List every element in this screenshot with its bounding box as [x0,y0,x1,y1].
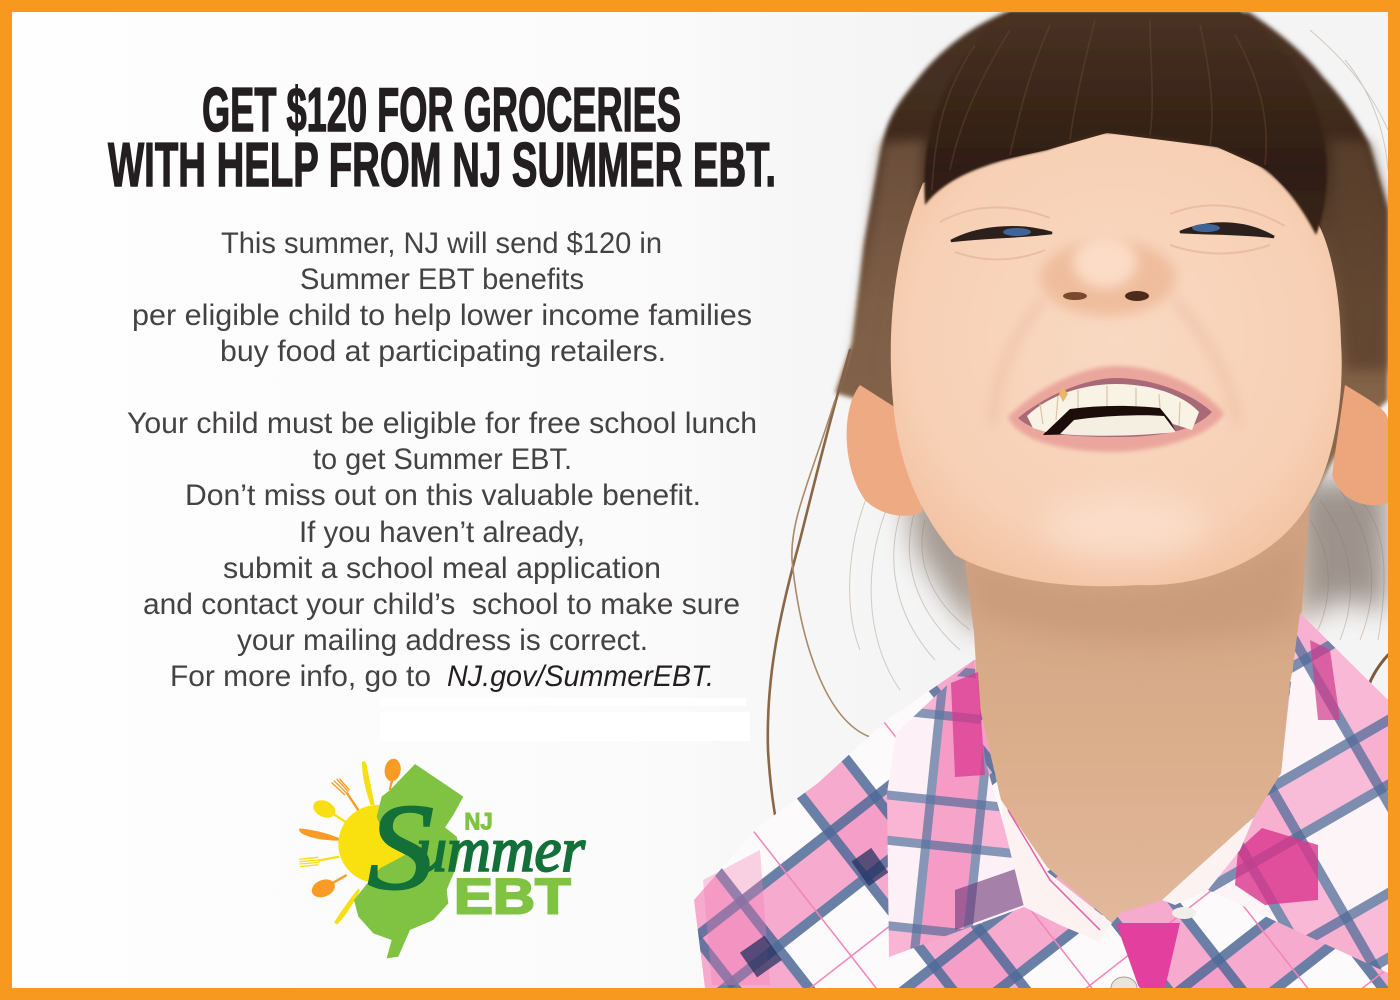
icon: sun [338,805,416,883]
eligibility paragraph: Your child must be eligible for free school lunch [127,407,757,440]
eligibility paragraph: and contact your child’s school to make sure [143,588,740,621]
right eye [1180,224,1274,237]
eligibility paragraph [127,407,757,693]
shirt panel under left collar [889,907,1140,988]
long loose hair strands [768,350,1388,930]
photo: smiling girl in plaid shirt [694,12,1388,999]
lower teeth [1060,415,1176,436]
logo text: EBT: EBT [454,868,571,924]
upper teeth [1027,384,1199,432]
hair lighter side strands [850,40,1388,400]
left collar [887,660,1112,957]
left eye [951,227,1052,241]
logo text: Summer: ummer [417,815,585,885]
eligibility paragraph: If you haven’t already, [299,516,585,549]
headline [108,76,776,200]
logo text: Summer: S [367,778,434,915]
headline: GET $120 FOR GROCERIES [202,76,681,145]
white patches behind the text [380,698,750,741]
nose [1040,236,1176,316]
icon: New Jersey state shape [354,764,463,958]
eligibility paragraph: to get Summer EBT. [313,443,572,476]
eligibility paragraph: NJ.gov/SummerEBT. [447,660,714,693]
eligibility paragraph: submit a school meal application [223,552,661,585]
right collar [1162,613,1388,973]
shirt placket [1116,923,1180,988]
neck [960,500,1310,923]
hair wisps behind the neck [905,480,1388,640]
eligibility paragraph: Don’t miss out on this valuable benefit. [185,479,701,512]
right ear [1332,385,1388,505]
intro paragraph: buy food at participating retailers. [220,335,666,368]
logo text: Summer [367,778,585,915]
bangs [924,12,1327,235]
shirt body [694,615,1388,988]
hair [835,12,1388,500]
intro paragraph [132,227,752,368]
fine wispy hairs [850,30,1388,690]
shirt button [1111,977,1137,999]
eligibility paragraph: your mailing address is correct. [237,624,648,657]
shirt dark plaid crossings [703,848,888,985]
tooth gaps [1040,386,1180,426]
icon: utensils around the sun [299,758,402,924]
shirt panel under right collar [1165,890,1388,988]
intro paragraph: per eligible child to help lower income families [132,299,752,332]
shadow under the chin [960,540,1305,643]
smile creases [992,300,1238,425]
logo: NJ Summer EBT [299,758,585,958]
logo text: NJ: NJ [464,808,493,835]
intro paragraph: This summer, NJ will send $120 in [221,227,662,260]
face [891,133,1342,586]
chin glow [1045,493,1205,557]
left ear [847,385,922,516]
stained tooth tip [1059,386,1068,402]
eligibility paragraph: For more info, go to [170,660,431,693]
intro paragraph: Summer EBT benefits [300,263,584,296]
eyelid creases [940,205,1285,260]
headline: WITH HELP FROM NJ SUMMER EBT. [108,131,776,200]
mouth [1008,366,1224,452]
fringe strands [932,20,1266,190]
snap on placket [1172,907,1196,919]
